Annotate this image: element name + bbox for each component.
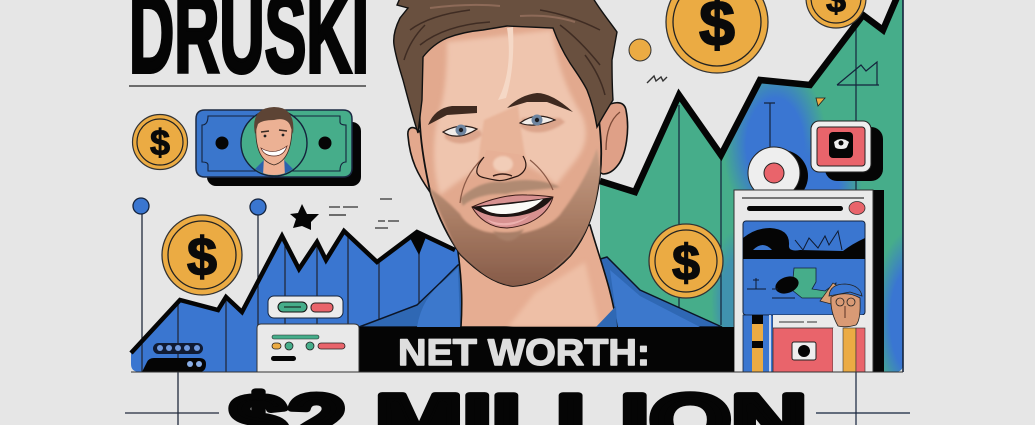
icon: dollar bill with portrait [196,107,361,186]
baseline [131,371,903,373]
blue image box [743,221,865,315]
smile lines [460,158,553,203]
icon: star and dashes [290,199,399,230]
beard [429,148,601,288]
right eye [520,114,555,126]
icon: small plain coin [629,39,651,61]
chart: right green mountain [600,0,910,425]
icon: mid dollar coin: $ [672,235,700,291]
icon: mid dollar coin [649,224,723,298]
panel: UI cards [257,296,359,372]
neck [457,225,617,327]
banner: net worth: NET WORTH: [398,332,650,373]
icon: white circle with pink dot [748,147,808,202]
icon: large dollar coin [162,215,242,295]
upper pill card [268,296,343,318]
jacket [359,257,722,327]
icon: camera button [811,121,883,181]
icon: dotted server pills [142,343,206,372]
soul patch [493,229,524,241]
icon: large dollar coin: $ [187,227,217,287]
portrait: man [359,0,722,327]
panel: UI mockup browser [734,190,884,372]
banner: net worth [359,327,734,373]
mouth [472,195,553,228]
chart: left blue mountain [125,198,480,425]
face [420,20,601,286]
icon: top center dollar coin [666,0,768,73]
lower UI blocks [743,315,865,372]
icon: squiggle [647,76,667,83]
nose [477,150,526,181]
icon: top right dollar coin [806,0,866,28]
icon: top-left dollar coin [132,114,188,170]
hair [394,0,617,133]
left ear [408,128,435,192]
moustache [460,180,560,206]
right ear [594,103,628,174]
icon: top-left dollar coin: $ [150,122,170,163]
tiny cartoon portrait [820,283,862,327]
left eye [443,124,477,136]
jacket folds [417,268,700,327]
lower form card [257,324,359,372]
face highlights and shade [429,27,601,288]
eyebrows [428,106,477,125]
